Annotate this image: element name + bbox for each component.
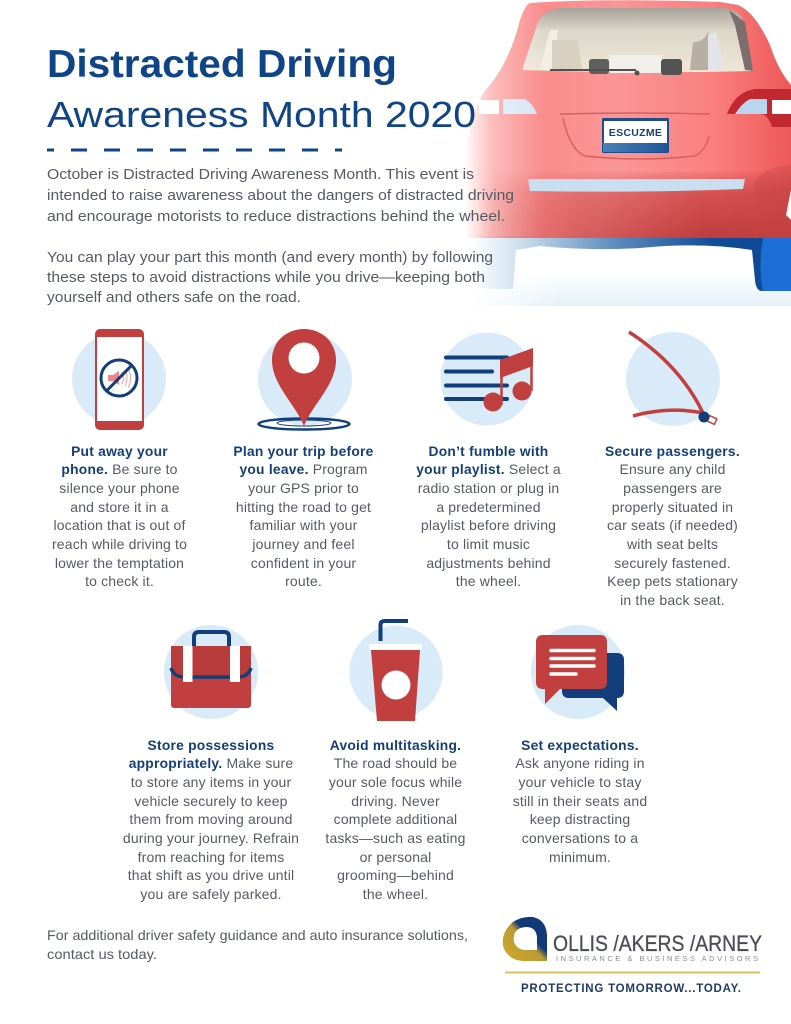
logo: Ollis Akers Arney: [503, 917, 762, 995]
step: playlist: the wheel.: [456, 573, 521, 589]
step: playlist: playlist before driving: [421, 517, 556, 533]
step: put away your phone: phone. Be sure to: [61, 461, 178, 477]
step: playlist: to limit music: [447, 536, 530, 552]
step: secure passengers: [605, 444, 740, 608]
step: secure passengers: car seats (if needed): [607, 517, 738, 533]
title: [47, 43, 476, 135]
intro text: You can play your part this month (and every month) by following: [47, 250, 493, 266]
step: plan your trip: hitting the road to get: [236, 499, 371, 515]
intro text: yourself and others safe on the road.: [47, 290, 301, 306]
step: store possessions: to store any items in your: [131, 774, 291, 790]
step: put away your phone: Put away your: [71, 444, 168, 459]
step: put away your phone: to check it.: [85, 573, 154, 589]
step: plan your trip: your GPS prior to: [248, 480, 359, 496]
step: set expectations: Set expectations.: [521, 738, 639, 753]
closing text: contact us today.: [47, 946, 157, 962]
step: secure passengers: Ensure any child: [619, 461, 726, 477]
step: plan your trip: [233, 444, 374, 589]
step: avoid multitasking: Avoid multitasking.: [330, 738, 461, 753]
step: avoid multitasking: complete additional: [334, 811, 457, 827]
step: store possessions: you are safely parked.: [140, 886, 282, 902]
step: store possessions: vehicle securely to keep: [134, 793, 288, 809]
step: plan your trip: Plan your trip before: [233, 444, 374, 459]
step: store possessions: from reaching for items: [138, 849, 284, 865]
license plate: ESCUZME: [609, 127, 662, 139]
icon: seat belt: [626, 332, 720, 426]
step: set expectations: Ask anyone riding in: [515, 755, 645, 771]
step: secure passengers: in the back seat.: [620, 592, 725, 608]
license plate: [602, 118, 669, 153]
step: avoid multitasking: your sole focus while: [329, 774, 462, 790]
step: set expectations: conversations to a: [522, 830, 638, 846]
step: set expectations: keep distracting: [530, 811, 630, 827]
step: set expectations: your vehicle to stay: [518, 774, 642, 790]
step: avoid multitasking: or personal: [360, 849, 431, 865]
closing text: For additional driver safety guidance and auto insurance solutions,: [47, 927, 468, 943]
logo: Ollis Akers Arney: OLLIS /AKERS /ARNEY: [553, 931, 762, 956]
step: put away your phone: reach while driving to: [52, 536, 187, 552]
step: secure passengers: properly situated in: [612, 499, 733, 515]
step: plan your trip: journey and feel: [251, 536, 355, 552]
step: secure passengers: passengers are: [623, 480, 722, 496]
icon: map pin: [258, 329, 352, 430]
dashed divider under title: [47, 148, 342, 152]
step: plan your trip: familiar with your: [250, 517, 358, 533]
logo: Ollis Akers Arney: PROTECTING TOMORROW...TODAY.: [521, 983, 741, 995]
step: secure passengers: securely fastened.: [614, 555, 731, 571]
step: set expectations: still in their seats and: [513, 793, 647, 809]
step: put away your phone: [52, 444, 187, 589]
title: Distracted Driving: [47, 43, 397, 86]
step: playlist: radio station or plug in: [418, 480, 559, 496]
icon: silenced phone: [72, 329, 166, 430]
step: plan your trip: confident in your: [251, 555, 356, 571]
step: put away your phone: location that is out of: [53, 517, 186, 533]
step: store possessions: Store possessions: [148, 738, 275, 753]
intro text: and encourage motorists to reduce distractions behind the wheel.: [47, 209, 505, 225]
intro text: intended to raise awareness about the dangers of distracted driving: [47, 188, 514, 204]
step: put away your phone: lower the temptation: [55, 555, 184, 571]
step: avoid multitasking: tasks—such as eating: [325, 830, 466, 846]
step: set expectations: [513, 738, 647, 865]
title: Awareness Month 2020: [47, 94, 476, 135]
step: playlist: adjustments behind: [426, 555, 551, 571]
step: put away your phone: silence your phone: [59, 480, 180, 496]
step: plan your trip: you leave. Program: [239, 461, 368, 477]
step: plan your trip: route.: [285, 573, 322, 589]
step: avoid multitasking: the wheel.: [363, 886, 428, 902]
icon: playlist and music note: [440, 332, 534, 426]
step: playlist: your playlist. Select a: [416, 461, 561, 477]
step: secure passengers: Secure passengers.: [605, 444, 740, 459]
step: store possessions: [123, 738, 299, 902]
intro text: October is Distracted Driving Awareness Month. This event is: [47, 167, 474, 183]
step: avoid multitasking: grooming—behind: [337, 867, 454, 883]
step: store possessions: them from moving around: [129, 811, 293, 827]
intro text: these steps to avoid distractions while you drive—keeping both: [47, 270, 485, 286]
icon: chat bubbles: [531, 625, 625, 719]
closing text: [47, 927, 468, 962]
step: store possessions: during your journey. Refrain: [123, 830, 299, 846]
step: secure passengers: with seat belts: [626, 536, 718, 552]
logo: Ollis Akers Arney: INSURANCE & BUSINESS ADVISORS: [556, 954, 758, 963]
step: put away your phone: and store it in a: [70, 499, 169, 515]
step: playlist: a predetermined: [436, 499, 541, 515]
icon: drink cup: [350, 621, 442, 721]
step: avoid multitasking: The road should be: [334, 755, 457, 771]
intro text: [47, 167, 514, 306]
step: playlist: [416, 444, 561, 589]
step: set expectations: minimum.: [549, 849, 611, 865]
icon: briefcase: [164, 625, 258, 719]
step: avoid multitasking: [325, 738, 466, 902]
step: store possessions: appropriately. Make sure: [129, 755, 293, 771]
step: playlist: Don’t fumble with: [429, 444, 548, 459]
step: secure passengers: Keep pets stationary: [607, 573, 738, 589]
illustration: red car rear view: [460, 0, 791, 306]
step: store possessions: that shift as you drive until: [128, 867, 294, 883]
step: avoid multitasking: driving. Never: [351, 793, 440, 809]
